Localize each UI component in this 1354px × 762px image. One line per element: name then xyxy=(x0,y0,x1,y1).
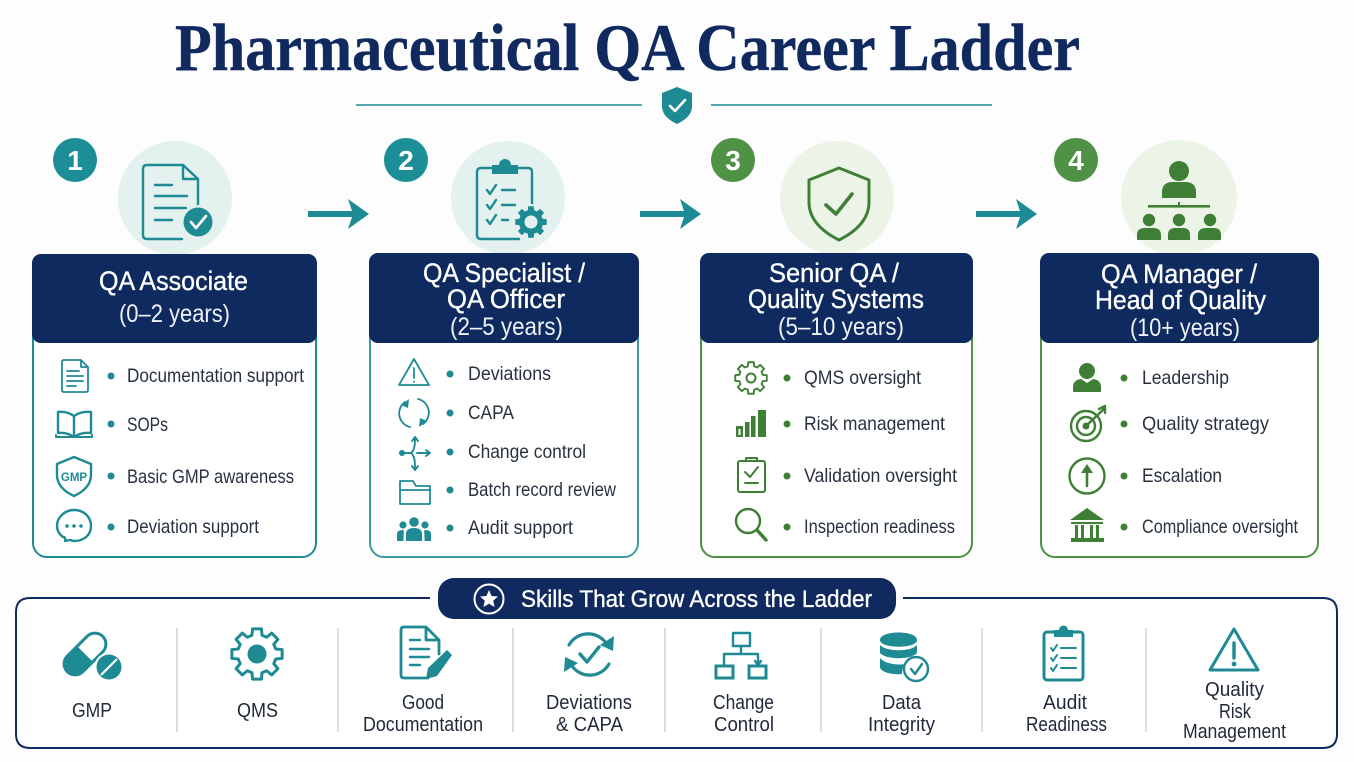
card 4 panel: Head of Quality xyxy=(1095,285,1267,315)
icon: speech bubble xyxy=(57,510,91,541)
skill: audit readiness: Readiness xyxy=(1026,714,1107,736)
card 4 list: Escalation xyxy=(1142,465,1222,487)
skill: deviations and CAPA: & CAPA xyxy=(556,714,624,736)
card 3 panel: Senior QA / xyxy=(769,258,900,288)
icon: document xyxy=(62,360,88,392)
arrow 2 to 3 xyxy=(640,199,701,229)
badge 4: 4 xyxy=(1068,145,1084,176)
skill: quality risk management: Risk xyxy=(1219,701,1252,723)
card 2 list: Deviations xyxy=(468,363,551,385)
icon: target xyxy=(1071,406,1105,441)
icon: clipboard check xyxy=(738,458,765,492)
skill: data integrity xyxy=(868,632,935,736)
title: Pharmaceutical QA Career Ladder xyxy=(175,11,1080,85)
step 2: QA Specialist xyxy=(369,138,639,557)
step 1: QA Associate xyxy=(32,138,317,557)
card 3 panel: Quality Systems xyxy=(748,284,924,314)
card 1 panel: (0–2 years) xyxy=(119,300,230,328)
icon: bar chart xyxy=(736,410,766,437)
skill: audit readiness: Audit xyxy=(1043,692,1087,714)
icon: GMP shield: GMP xyxy=(61,472,87,484)
skill: quality risk management: Management xyxy=(1183,721,1286,743)
card 4 list: Leadership xyxy=(1142,367,1229,389)
skill: deviations and CAPA xyxy=(546,634,632,736)
card 2 list: Change control xyxy=(468,441,586,463)
icon: GMP shield xyxy=(57,457,91,496)
icon: shield check xyxy=(780,141,894,255)
badge 3 xyxy=(711,138,755,182)
skill: change control: Control xyxy=(714,714,774,736)
icon: institution xyxy=(1070,508,1104,542)
card 3 list: Validation oversight xyxy=(804,465,958,487)
skill: QMS: QMS xyxy=(237,700,278,722)
card 2 list: CAPA xyxy=(468,402,514,424)
card 4 list: Quality strategy xyxy=(1142,413,1269,435)
card 4 list xyxy=(1070,363,1298,542)
arrow 1 to 2 xyxy=(308,199,369,229)
badge 1 xyxy=(53,138,97,182)
icon: gear xyxy=(735,362,767,394)
skill: GMP: GMP xyxy=(72,700,112,722)
arrow 3 to 4 xyxy=(976,199,1037,229)
skill: change control xyxy=(713,633,774,736)
icon: document with check xyxy=(118,141,232,255)
step 3: Senior QA xyxy=(700,138,973,557)
skills heading pill: Skills That Grow Across the Ladder xyxy=(521,586,872,613)
card 1 list: Documentation support xyxy=(127,365,305,387)
icon: org chart of people xyxy=(1121,140,1237,256)
icon: warning triangle xyxy=(399,359,429,385)
badge 1: 1 xyxy=(67,145,83,176)
icon: book xyxy=(56,412,92,437)
card 2 panel: (2–5 years) xyxy=(450,313,563,341)
skill: quality risk management xyxy=(1183,629,1286,743)
card 3 list xyxy=(735,362,958,540)
card 3 list: Inspection readiness xyxy=(804,516,955,538)
skills heading pill xyxy=(438,578,896,619)
card 2 panel: QA Specialist / xyxy=(423,258,586,288)
badge 3: 3 xyxy=(725,145,741,176)
skill: data integrity: Data xyxy=(882,692,922,714)
card 2 list: Batch record review xyxy=(468,479,617,501)
card 2 list xyxy=(397,359,617,541)
skill: change control: Change xyxy=(713,692,774,714)
skill: good documentation: Documentation xyxy=(363,714,483,736)
badge 4 xyxy=(1054,138,1098,182)
skill: good documentation xyxy=(363,627,483,736)
skill: deviations and CAPA: Deviations xyxy=(546,692,632,714)
skill: good documentation: Good xyxy=(402,692,444,714)
card 1 list: SOPs xyxy=(127,414,168,436)
skill: GMP xyxy=(60,629,124,722)
icon: magnifier xyxy=(736,509,766,540)
panel: skills across the ladder xyxy=(16,578,1337,748)
skill: audit readiness xyxy=(1026,626,1107,736)
skill: data integrity: Integrity xyxy=(868,714,935,736)
card 1 list: Basic GMP awareness xyxy=(127,466,294,488)
icon: title shield xyxy=(662,87,692,124)
card 3 panel xyxy=(700,253,973,557)
card 1 panel xyxy=(32,254,317,557)
card 3 list: QMS oversight xyxy=(804,367,922,389)
card 4 list: Compliance oversight xyxy=(1142,516,1298,538)
skill: QMS xyxy=(232,629,282,722)
card 2 list: Audit support xyxy=(468,517,574,539)
card 4 panel: (10+ years) xyxy=(1130,314,1240,342)
icon: people xyxy=(397,517,431,541)
badge 2 xyxy=(384,138,428,182)
icon: clipboard with gear xyxy=(451,141,565,255)
card 3 panel: (5–10 years) xyxy=(778,313,904,341)
icon: cycle xyxy=(399,399,429,427)
card 3 list: Risk management xyxy=(804,413,946,435)
card 2 panel xyxy=(369,253,639,557)
card 4 panel: QA Manager / xyxy=(1101,259,1258,289)
icon: escalation arrow in circle xyxy=(1070,458,1104,494)
card 1 list: Deviation support xyxy=(127,516,259,538)
badge 2: 2 xyxy=(398,145,414,176)
card 1 list xyxy=(56,360,305,541)
card 1 panel: QA Associate xyxy=(99,266,248,296)
card 2 panel: QA Officer xyxy=(447,284,565,314)
skill: quality risk management: Quality xyxy=(1205,679,1264,701)
step 4: QA Manager xyxy=(1040,138,1319,557)
icon: folder xyxy=(400,481,430,504)
icon: branching arrows xyxy=(399,437,430,470)
card 4 panel xyxy=(1040,253,1319,557)
icon: person xyxy=(1073,363,1101,392)
